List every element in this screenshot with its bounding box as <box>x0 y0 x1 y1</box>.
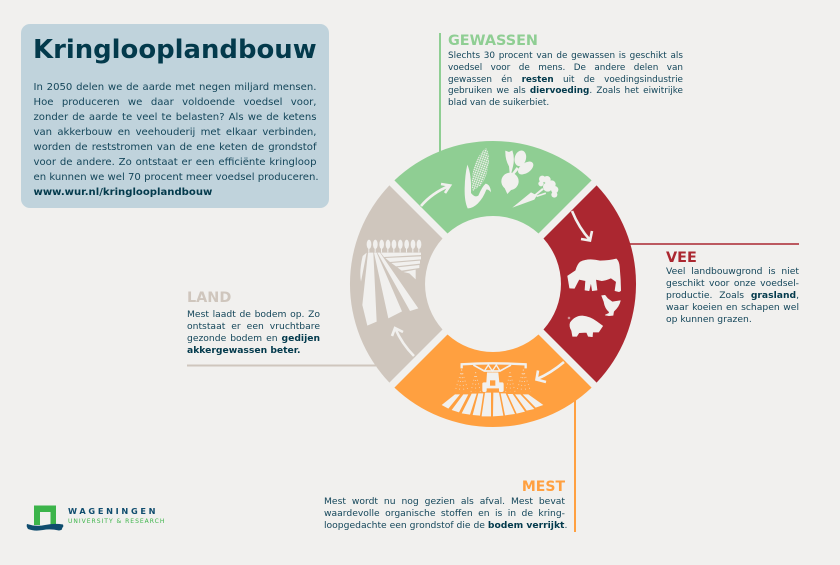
intro text: Hoe produceren we daar voldoende voedsel voor, <box>34 96 316 108</box>
title: Kringlooplandbouw <box>33 35 317 65</box>
text: land: gezonde bodem en gedijen <box>187 333 320 344</box>
intro text: en kunnen we wel 70 procent meer voedsel produceren. <box>34 172 319 183</box>
furrows <box>360 253 418 326</box>
logo mark <box>26 506 64 531</box>
heading: gewassen: GEWASSEN <box>448 33 538 49</box>
block: mest <box>324 479 567 531</box>
arrow: mest to land <box>392 328 414 356</box>
panel: introduction <box>21 24 328 208</box>
corn <box>465 148 491 208</box>
block: gewassen <box>448 33 683 108</box>
text: gewassen: gebruiken we als diervoeding. Zoals het eiwitrijke <box>448 86 683 96</box>
icon: tractor with sprayers <box>442 363 543 416</box>
logo subtitle: UNIVERSITY & RESEARCH <box>68 518 165 525</box>
text: vee: geschikt voor onze voedsel- <box>666 278 799 289</box>
text: mest: Mest wordt nu nog gezien als afval. Mest bevat <box>324 496 565 507</box>
text: mest: waardevolle organische stoffen en is in de kring- <box>324 508 565 519</box>
segment: land <box>350 185 442 383</box>
block: land <box>187 290 320 356</box>
beet <box>501 149 536 194</box>
text: mest <box>324 496 567 531</box>
horizontal strips <box>381 253 421 279</box>
text: gewassen: gewassen én resten uit de voedingsindustrie <box>448 75 683 85</box>
intro text: In 2050 delen we de aarde met negen miljard mensen. <box>34 82 316 92</box>
carrot <box>512 176 558 208</box>
text: vee: Veel landbouwgrond is niet <box>666 266 799 277</box>
text: vee: waar koeien en schapen wel <box>666 302 799 313</box>
text: mest: loopgedachte een grondstof die de bodem verrijkt. <box>324 520 567 531</box>
intro text: zonder de aarde te veel te belasten? Als we de ketens <box>34 112 316 123</box>
arrow: vee to mest <box>536 362 564 382</box>
block: vee <box>666 250 799 325</box>
pig <box>568 316 603 337</box>
heading: mest: MEST <box>522 479 565 495</box>
icon: fields <box>360 240 421 326</box>
tractor <box>482 372 504 392</box>
intro text: www.wur.nl/kringlooplandbouw <box>34 187 212 198</box>
icon: crops <box>465 148 558 208</box>
intro text: worden de reststromen van de ene keten de grondstof <box>34 142 316 153</box>
boom <box>462 363 526 371</box>
text: gewassen <box>448 51 683 108</box>
arrow: gewassen to vee <box>572 211 592 240</box>
spray <box>455 370 531 392</box>
text: gewassen: voedsel voor de mens. De andere delen van <box>448 63 683 73</box>
field strips <box>442 393 543 416</box>
icon: animals <box>568 259 621 337</box>
segment: mest <box>394 334 592 427</box>
arrow: land to gewassen <box>421 184 450 206</box>
heading: land: LAND <box>187 290 231 306</box>
segment: vee <box>544 185 636 383</box>
text: gewassen: Slechts 30 procent van de gewassen is geschikt als <box>448 51 683 61</box>
heading: vee: VEE <box>666 250 697 266</box>
text: land: Mest laadt de bodem op. Zo <box>187 309 320 320</box>
segment: gewassen <box>394 141 592 234</box>
text: land <box>187 309 320 356</box>
text: vee: productie. Zoals grasland, <box>666 290 799 301</box>
intro text: van akkerbouw en veehouderij met elkaar verbinden, <box>34 127 316 138</box>
text: gewassen: blad van de suikerbiet. <box>448 98 549 108</box>
logo: Wageningen University & Research <box>26 506 165 531</box>
logo name: WAGENINGEN <box>68 506 158 516</box>
intro text: voor de andere. Zo ontstaat er een efficiënte kringloop <box>34 157 316 168</box>
text: vee <box>666 266 799 325</box>
cow <box>568 259 621 292</box>
text: land: akkergewassen beter. <box>187 345 300 356</box>
text: vee: op kunnen grazen. <box>666 314 752 325</box>
trees <box>367 240 421 252</box>
intro text <box>34 82 319 198</box>
text: land: ontstaat er een vruchtbare <box>187 321 320 332</box>
hen <box>602 295 620 316</box>
